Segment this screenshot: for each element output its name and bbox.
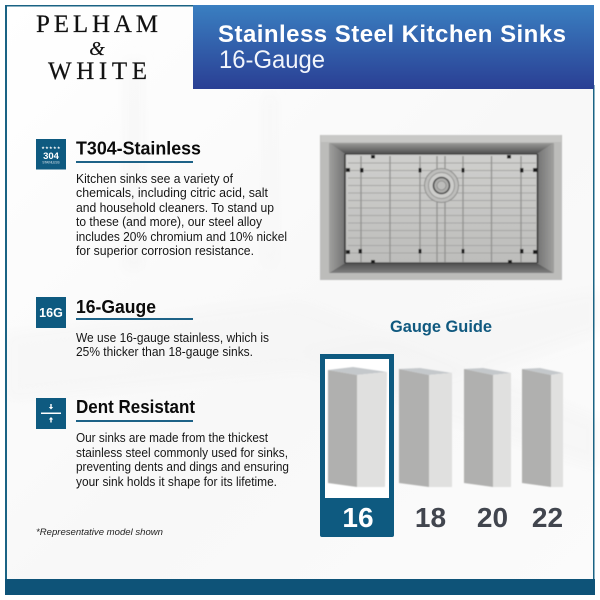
gauge labels: 18 [415,502,446,533]
icon: 16G badge [36,297,66,328]
gauge block 20 [464,368,511,487]
text block: for superior corrosion resistance. [76,244,254,258]
sink rack clips [346,155,537,264]
gauge block 22 [522,368,563,487]
section: T304-Stainless [36,138,287,258]
icon: 304 stainless badge: 304 [43,151,60,162]
section: 16-Gauge [36,296,269,359]
gauge block 18 [399,368,452,487]
text block [76,431,289,489]
icon: 16G badge: 16G [39,306,63,320]
logo: PELHAM [36,11,158,38]
footer band [5,579,595,595]
title: Stainless Steel Kitchen Sinks [218,21,566,48]
logo: WHITE [48,58,147,85]
text block: your sink holds it shape for its lifetime. [76,475,277,489]
section: Dent Resistant [36,396,289,489]
text block: 25% thicker than 18-gauge sinks. [76,345,253,359]
gauge labels: 22 [532,502,563,533]
gauge labels: 20 [477,502,508,533]
icon: 304 stainless badge: ★★★★★ [41,145,61,150]
text block: to these (and more), our steel alloy [76,215,263,229]
sink image [320,135,562,280]
logo: & [89,38,105,60]
sink drain [424,168,458,202]
chart heading: Gauge Guide: Gauge Guide [390,317,492,336]
text block: and household cleaners. To stand up [76,201,274,215]
text block [76,172,287,258]
text block: Our sinks are made from the thickest [76,431,268,445]
heading: 16-Gauge [76,296,156,317]
gauge block 16 [328,367,387,487]
text block: Kitchen sinks see a variety of [76,172,233,186]
gauge labels [342,502,563,533]
icon: dent arrows [36,398,66,429]
text block [76,331,269,359]
heading: T304-Stainless [76,138,201,158]
sink rack wires [348,156,536,262]
text block: includes 20% chromium and 10% nickel [76,230,287,244]
text block: stainless steel commonly used for sinks, [76,446,288,460]
logo [36,11,158,85]
gauge guide selected frame [320,354,394,537]
gauge labels: 16 [342,502,374,533]
icon: 304 stainless badge: STAINLESS [42,160,60,164]
footnote: *Representative model shown [36,527,163,538]
text block: We use 16-gauge stainless, which is [76,331,269,345]
text block: chemicals, including citric acid, salt [76,186,268,200]
heading: Dent Resistant [76,396,195,417]
text block: preventing dents and dings and ensuring [76,460,289,474]
subtitle: 16-Gauge [219,46,325,74]
icon: 304 stainless badge [36,139,66,170]
title banner [193,5,594,89]
